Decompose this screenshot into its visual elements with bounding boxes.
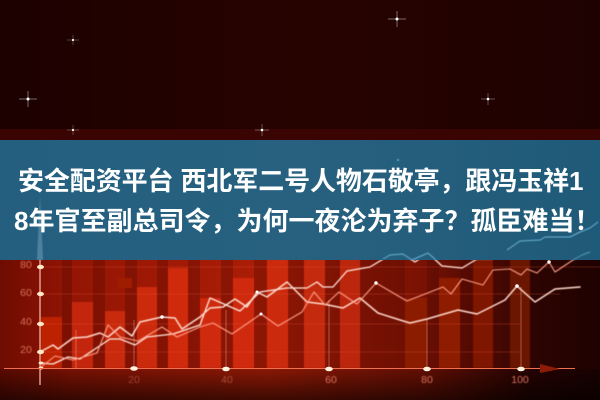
strip of dark red above the title band: [0, 129, 600, 140]
chart: vertical drop lines: [76, 287, 521, 368]
chart: axis labels: 60: [20, 287, 32, 299]
chart: axis labels: 20: [128, 374, 140, 386]
series: pink line: [40, 255, 582, 368]
background: dark starry sky: [0, 0, 600, 140]
title text: 安全配资平台 西北军二号人物石敬亭，跟冯玉祥1: [18, 166, 583, 196]
chart: line markers: [160, 260, 551, 319]
chart: axis labels: 40: [221, 374, 233, 386]
bar chart: [41, 250, 530, 368]
chart: axis labels: [20, 259, 529, 386]
chart background field: [0, 140, 600, 400]
chart: dark columns between bars: [62, 260, 510, 368]
chart: x axis: [4, 364, 575, 373]
chart: axis labels: 80: [421, 374, 433, 386]
chart: axis labels: 60: [325, 374, 337, 386]
chart: y axis: [37, 260, 44, 385]
line chart series: [40, 220, 600, 368]
title band: [0, 140, 600, 260]
series: upper white line: [40, 220, 600, 364]
stars: [19, 11, 495, 136]
chart: axis labels: 80: [20, 259, 32, 271]
chart: horizontal grid lines: [40, 267, 600, 352]
title text: [14, 166, 600, 236]
chart lines showing through the band: [37, 159, 598, 260]
title text: 8年官至副总司令，为何一夜沦为弃子？孤臣难当！: [14, 206, 600, 236]
chart: axis labels: 40: [20, 316, 32, 328]
series: lower white line: [40, 282, 580, 352]
chart: floor shade: [0, 369, 600, 400]
chart: axis labels: 20: [20, 344, 32, 356]
chart: axis labels: 100: [511, 374, 529, 386]
